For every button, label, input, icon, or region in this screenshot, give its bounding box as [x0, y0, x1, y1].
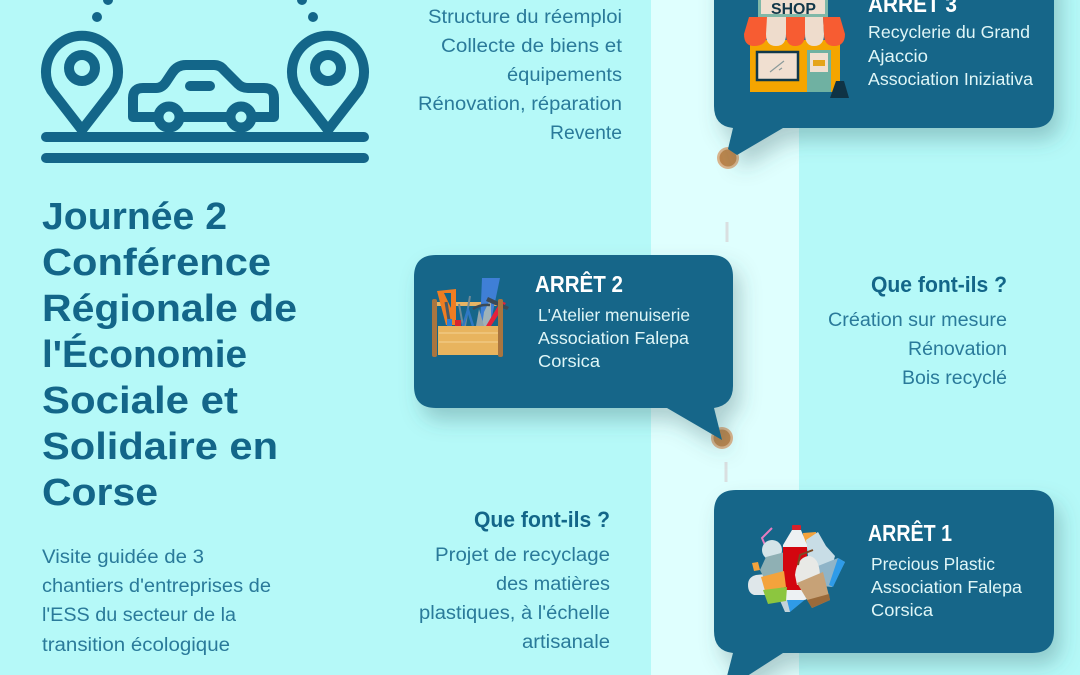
title: Conférence: [42, 242, 271, 284]
text: stop 3 activities: Rénovation, réparation: [418, 94, 622, 115]
speech bubble stop 3: [714, 0, 1054, 155]
stop 1 description: Precious Plastic: [871, 554, 995, 574]
text: stop 1 activities: [419, 507, 610, 653]
intro text: chantiers d'entreprises de: [42, 576, 271, 597]
central route strip: [651, 0, 799, 675]
icon: toolbox: [432, 278, 509, 357]
title: Journée 2: [42, 196, 227, 238]
icon: shop: SHOP: [771, 1, 816, 18]
text: stop 2 activities: Que font-ils ?: [871, 272, 1007, 297]
speech bubble stop 1: [714, 490, 1054, 675]
panel: stop 1: [714, 490, 1054, 675]
title: l'Économie: [42, 332, 247, 376]
title: Solidaire en: [42, 426, 278, 468]
stop 2 heading: ARRÊT 2: [535, 270, 623, 297]
text: stop 2 activities: Création sur mesure: [828, 310, 1007, 331]
text: stop 3 activities: équipements: [507, 65, 622, 86]
title: Sociale et: [42, 380, 238, 422]
stop 1 heading: ARRÊT 1: [868, 519, 952, 546]
stop 1 description: [871, 554, 1022, 620]
intro text: l'ESS du secteur de la: [42, 605, 236, 626]
text: stop 1 activities: Projet de recyclage: [435, 545, 610, 566]
route dash lower: [724, 462, 728, 482]
stop 3 description: Ajaccio: [868, 46, 928, 66]
stop 3 description: Recyclerie du Grand: [868, 22, 1030, 42]
text: stop 2 activities: Bois recyclé: [902, 368, 1007, 389]
text: stop 3 activities: Structure du réemploi: [428, 7, 622, 28]
text: stop 3 activities: [418, 7, 623, 144]
text: stop 3 activities: Revente: [550, 123, 622, 144]
route dash upper: [726, 222, 728, 242]
stop 2 description: [538, 305, 690, 371]
speech bubble stop 2: [414, 255, 733, 440]
stop 1 description: Corsica: [871, 600, 933, 620]
marker: stop 2: [711, 427, 733, 449]
text: stop 1 activities: plastiques, à l'échelle: [419, 603, 610, 624]
panel: stop 2: [414, 255, 733, 440]
stop 1 description: Association Falepa: [871, 577, 1022, 597]
intro text: transition écologique: [42, 635, 230, 656]
panel: stop 3: [714, 0, 1054, 155]
text: stop 1 activities: artisanale: [522, 632, 610, 653]
text: stop 1 activities: Que font-ils ?: [474, 507, 610, 532]
stop 3 description: [868, 22, 1033, 89]
stop 2 description: Association Falepa: [538, 328, 689, 348]
text: stop 2 activities: Rénovation: [908, 339, 1007, 360]
marker: stop 3: [717, 147, 739, 169]
stop 2 description: Corsica: [538, 351, 600, 371]
title: Régionale de: [42, 288, 297, 330]
text: stop 3 activities: Collecte de biens et: [441, 36, 623, 57]
icon: plastic waste: [748, 525, 845, 612]
text: stop 1 activities: des matières: [496, 574, 610, 595]
title: [42, 196, 297, 514]
stop 2 description: L'Atelier menuiserie: [538, 305, 690, 325]
intro text: Visite guidée de 3: [42, 547, 204, 568]
stop 3 description: Association Iniziativa: [868, 69, 1033, 89]
icon: shop: [744, 0, 849, 98]
intro text: [42, 547, 271, 656]
title: Corse: [42, 472, 158, 514]
icon: car between map pins: [46, 0, 364, 158]
text: stop 2 activities: [828, 272, 1007, 389]
